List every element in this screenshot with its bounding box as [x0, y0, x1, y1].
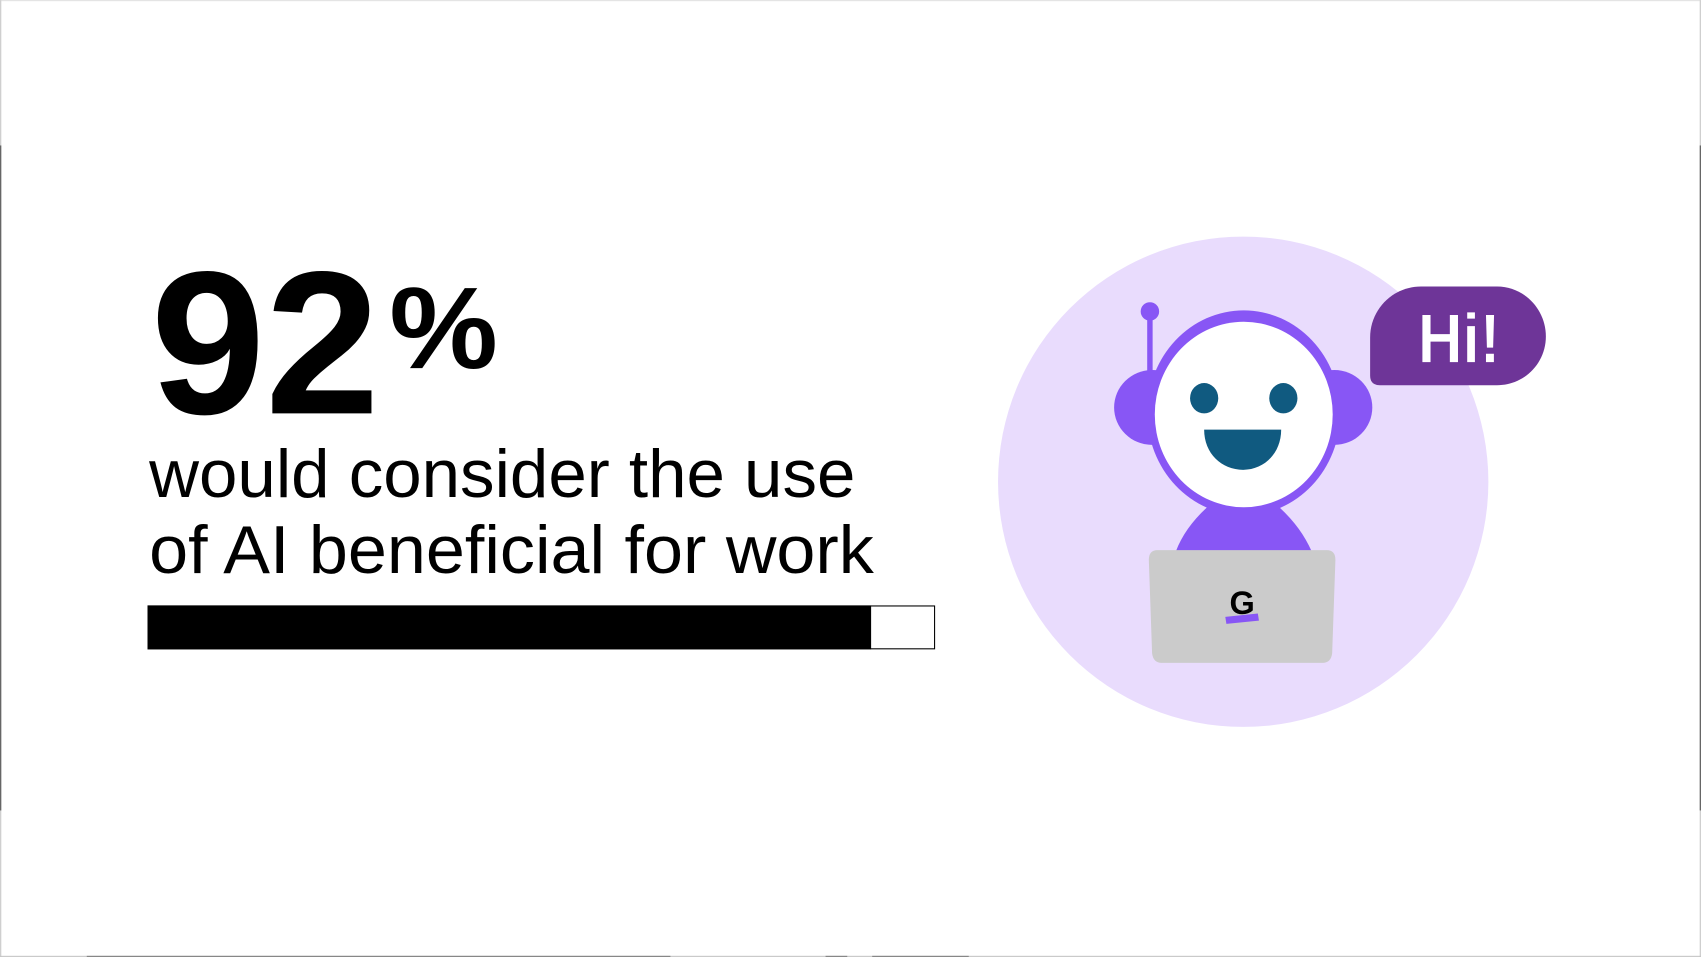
background circle — [998, 237, 1488, 727]
logo underline — [1225, 614, 1259, 624]
icon: mouth — [1204, 430, 1281, 470]
line 1: would consider the use — [148, 437, 855, 512]
laptop — [1149, 550, 1335, 663]
icon: left eye — [1190, 383, 1218, 413]
bar track — [148, 606, 935, 649]
line 2: of AI beneficial for work — [149, 513, 874, 588]
logo letter G: G — [1229, 585, 1255, 621]
description text — [148, 437, 874, 588]
big number 92: 92 — [151, 229, 380, 457]
bar fill — [148, 605, 871, 649]
robot head — [1147, 310, 1340, 515]
statistic: 92% — [151, 229, 498, 457]
illustration: robot with laptop — [998, 237, 1546, 727]
robot body — [1176, 502, 1312, 551]
progress bar: 92 percent — [148, 605, 935, 649]
icon: left ear cup — [1114, 370, 1190, 445]
icon: right eye — [1269, 383, 1297, 413]
percent sign: % — [389, 263, 498, 393]
bubble text: Hi! — [1418, 299, 1500, 377]
icon: right ear cup — [1296, 370, 1372, 445]
icon: antenna — [1141, 302, 1159, 380]
speech bubble — [1370, 286, 1546, 385]
